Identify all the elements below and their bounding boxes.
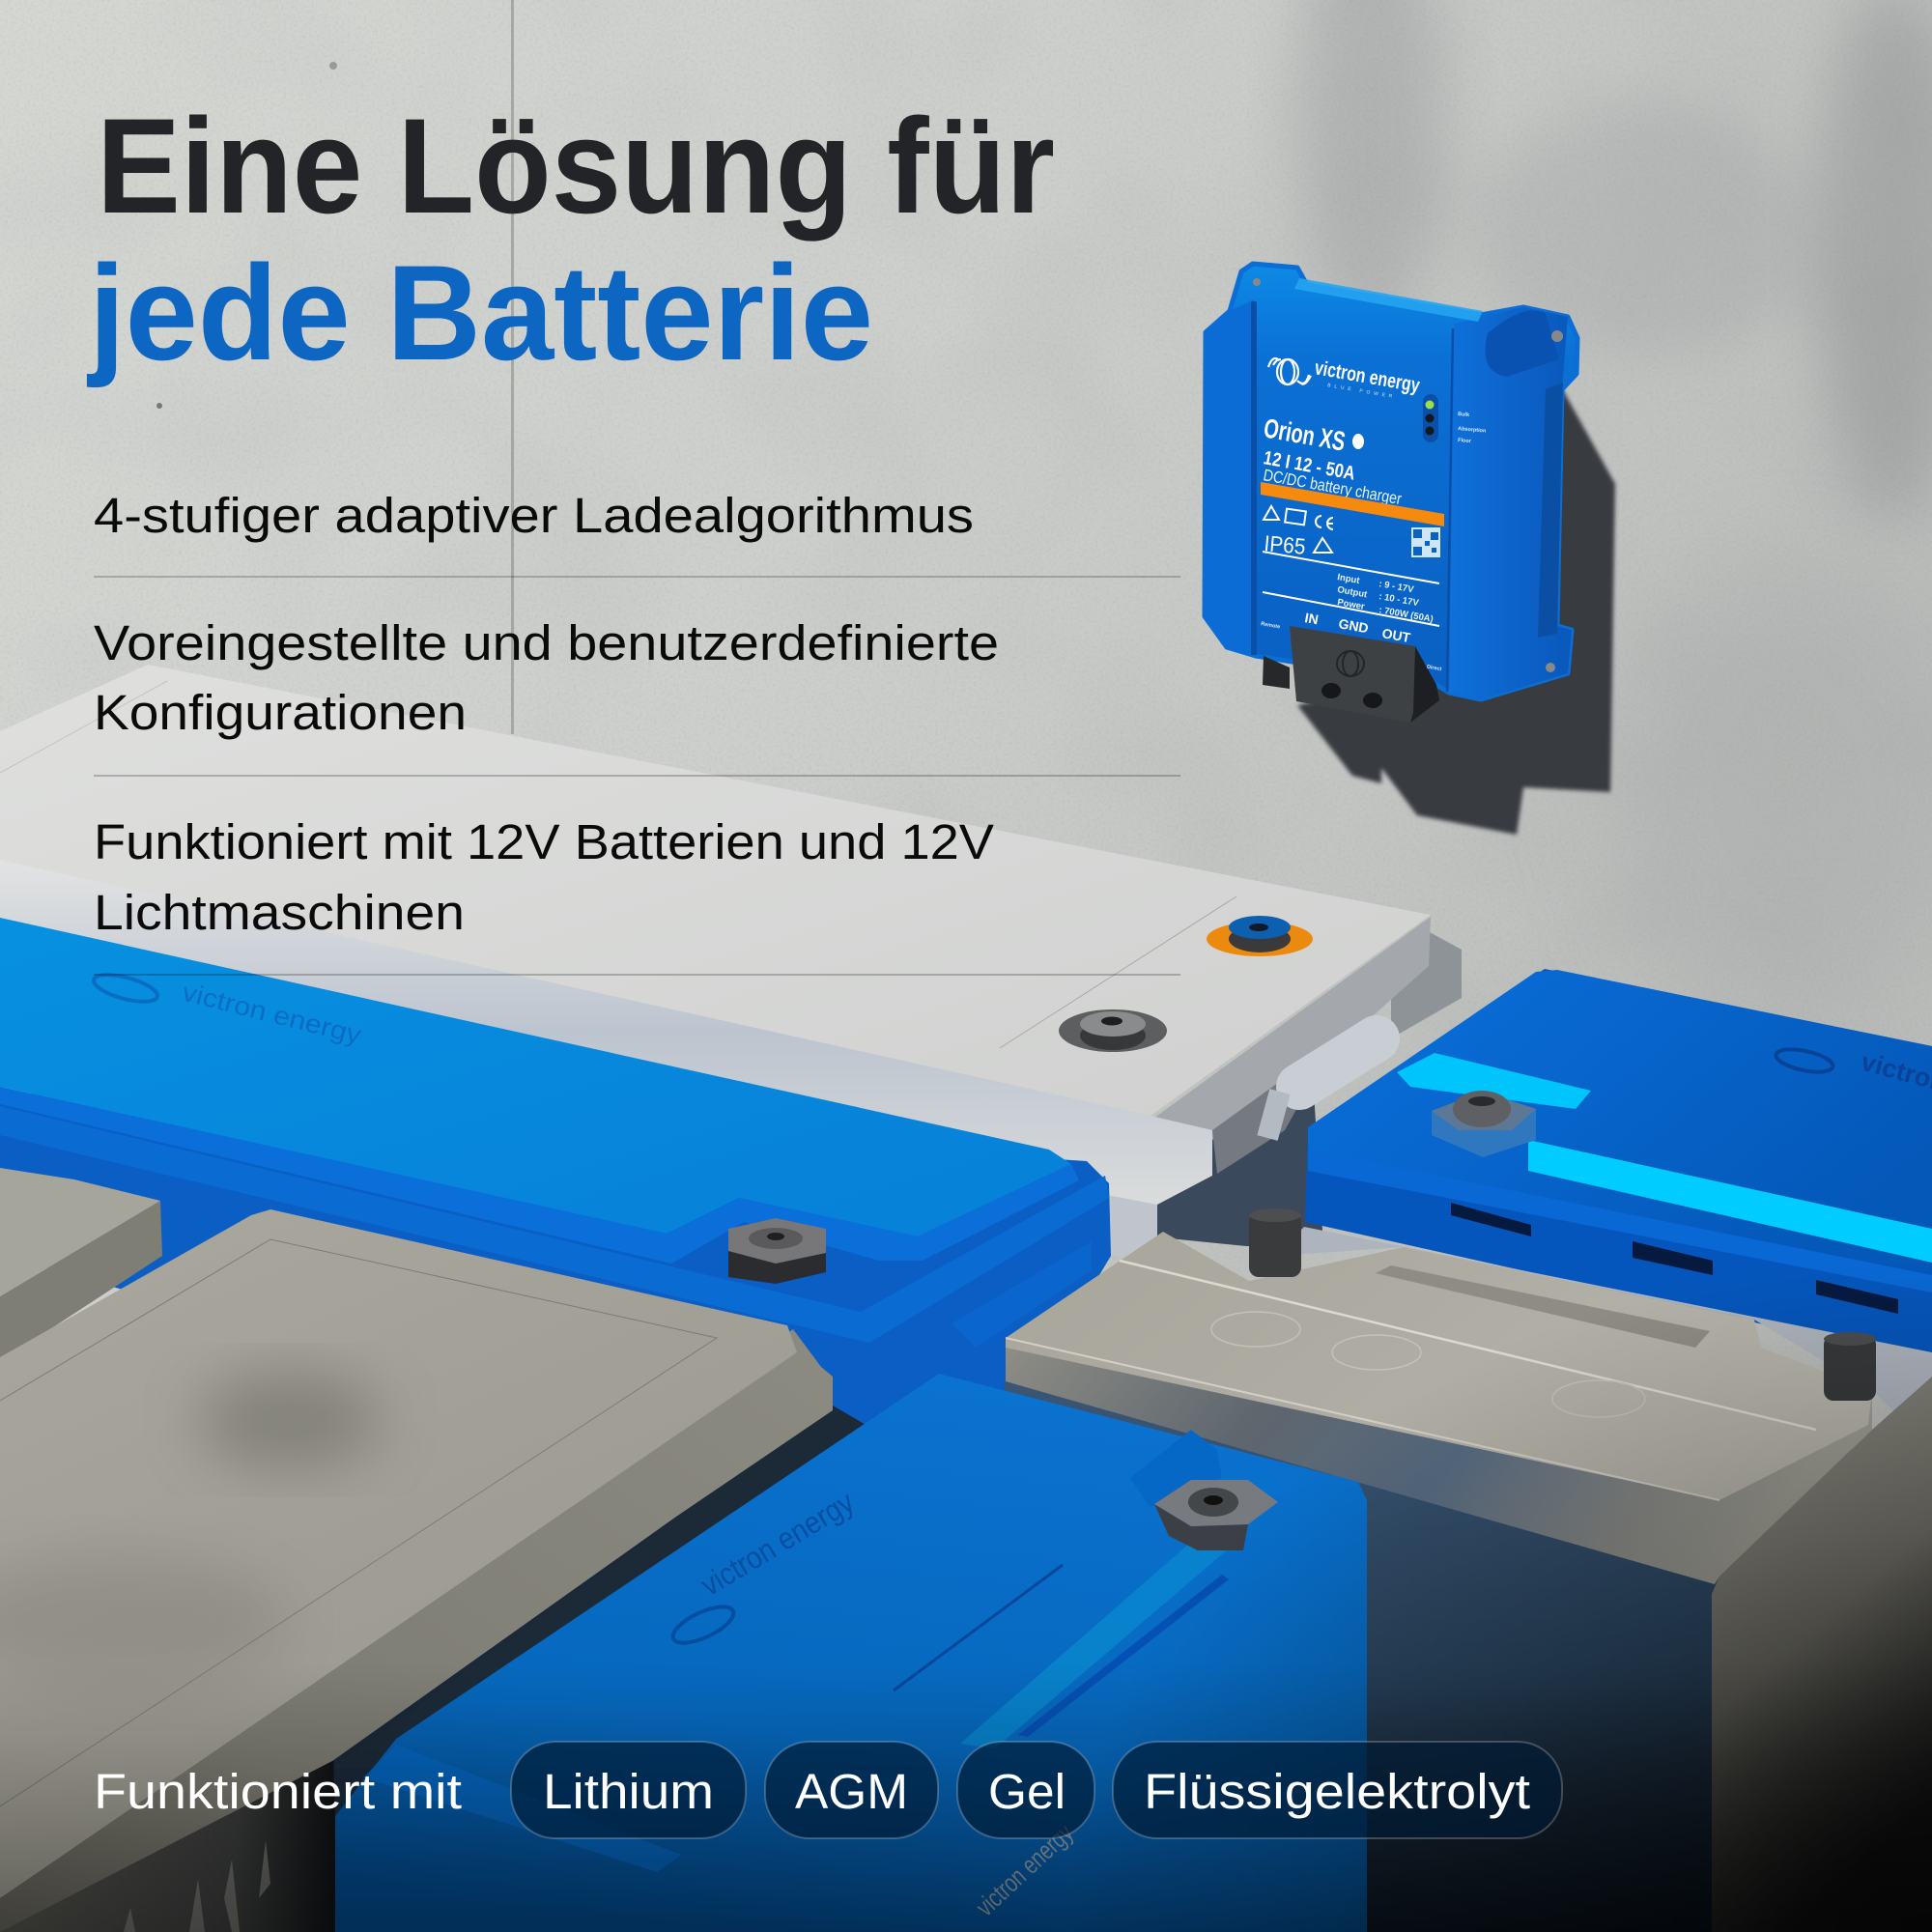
terminal pins bbox=[1249, 1208, 1876, 1401]
embossed brand bbox=[668, 1484, 860, 1650]
front blue battery bbox=[335, 1374, 1367, 1932]
far left grey battery bbox=[0, 1168, 162, 1362]
embossed brand: victron energy bbox=[695, 1484, 860, 1603]
battery types row bbox=[94, 1742, 1562, 1838]
small labels: Floor bbox=[1458, 438, 1472, 444]
cable bbox=[1267, 1038, 1377, 1138]
embossed brand: victron energy bbox=[180, 978, 365, 1050]
terminal cover bbox=[1290, 626, 1439, 723]
top right blue battery bbox=[1305, 969, 1932, 1362]
bracket bbox=[1391, 932, 1462, 1038]
spec table: : 9 - 17V bbox=[1378, 579, 1415, 595]
spec table: Power bbox=[1336, 597, 1366, 612]
row label: Funktioniert mit bbox=[94, 1764, 462, 1819]
battery front rim bbox=[0, 860, 1212, 1205]
Orion XS charger: BLUE POWER bbox=[1327, 383, 1393, 400]
hex terminal bbox=[1432, 1091, 1536, 1157]
spec table bbox=[1336, 572, 1435, 625]
pill: Lithium bbox=[511, 1742, 746, 1838]
feature 3: Lichtmaschinen bbox=[94, 885, 465, 940]
lid top bbox=[1006, 1232, 1872, 1500]
left terminal connector bbox=[1263, 656, 1290, 689]
side spikes bbox=[124, 1840, 270, 1932]
dark gap below white battery bbox=[1140, 1092, 1323, 1246]
lid front bbox=[1006, 1338, 1872, 1584]
battery top bbox=[0, 665, 1431, 1116]
charger body bbox=[1205, 264, 1577, 699]
pill: Gel: Gel bbox=[988, 1764, 1065, 1819]
positive terminal bbox=[1207, 916, 1313, 956]
feature 2 bbox=[94, 615, 999, 740]
right side rail bbox=[1538, 383, 1563, 638]
spec rules bbox=[1263, 552, 1439, 626]
right side bbox=[1712, 1377, 1932, 1932]
small labels: Bulk bbox=[1458, 412, 1470, 418]
white battery bbox=[0, 665, 1462, 1256]
terminal labels: IN bbox=[1303, 610, 1320, 627]
rating: 12 I 12 - 50A bbox=[1262, 447, 1356, 485]
embossed slot bbox=[894, 1565, 1063, 1690]
terminal labels: OUT bbox=[1380, 625, 1412, 645]
lid slot bbox=[1018, 1575, 1229, 1737]
small labels: Remote bbox=[1261, 621, 1281, 630]
orange stripe bbox=[1261, 482, 1444, 526]
bluetooth icon bbox=[1352, 434, 1364, 449]
pill: Flüssigelektrolyt: Flüssigelektrolyt bbox=[1144, 1764, 1530, 1819]
pill: AGM bbox=[765, 1742, 938, 1838]
pill: AGM: AGM bbox=[795, 1764, 908, 1819]
battery side bbox=[1151, 917, 1431, 1140]
bottom vignette bbox=[0, 1256, 1932, 1932]
brand on lid bbox=[1775, 1045, 1932, 1097]
title bbox=[86, 90, 1055, 388]
hex terminal bbox=[728, 1218, 826, 1284]
spec table: Output bbox=[1336, 584, 1369, 601]
gap shadow toward blue battery bbox=[333, 1406, 874, 1768]
top highlight bbox=[1294, 278, 1483, 322]
small labels bbox=[1261, 412, 1487, 672]
lower front bbox=[1005, 1381, 1719, 1932]
hex terminal bbox=[1154, 1480, 1278, 1550]
pill: Gel bbox=[957, 1742, 1094, 1838]
charger cast shadow on wall bbox=[1297, 382, 1615, 835]
feature 2: Voreingestellte und benutzerdefinierte bbox=[94, 615, 999, 670]
QR code bbox=[1411, 527, 1440, 557]
description: DC/DC battery charger bbox=[1262, 466, 1404, 508]
rim bbox=[0, 1329, 833, 1932]
title line 1: Eine Lösung für bbox=[97, 90, 1055, 242]
small labels: VE.Direct bbox=[1418, 663, 1442, 672]
upper right lug bbox=[1486, 310, 1559, 377]
small labels: Absorption bbox=[1458, 426, 1487, 435]
title line 2: jede Batterie bbox=[86, 237, 873, 388]
spec table: : 700W (50A) bbox=[1378, 605, 1435, 625]
charger brand: victron energy bbox=[1313, 356, 1422, 397]
dark side bbox=[0, 1753, 338, 1932]
front left grey battery bbox=[0, 1209, 874, 1932]
feature 2: Konfigurationen bbox=[94, 685, 467, 740]
slots bbox=[1451, 1203, 1898, 1314]
pill: Flüssigelektrolyt bbox=[1113, 1742, 1562, 1838]
charger logo bbox=[1268, 358, 1311, 384]
feature list bbox=[94, 488, 1180, 976]
status LEDs bbox=[1423, 394, 1438, 442]
feature 1: 4-stufiger adaptiver Ladealgorithmus bbox=[94, 488, 974, 543]
feature 3 bbox=[94, 814, 994, 940]
background: concrete wall bbox=[0, 0, 1932, 1449]
light blue battery bbox=[0, 918, 1111, 1468]
certification icons bbox=[1264, 506, 1333, 553]
top face bbox=[1308, 970, 1932, 1285]
pill: Lithium: Lithium bbox=[543, 1764, 714, 1819]
spec table: Input bbox=[1336, 572, 1361, 586]
top bbox=[0, 1209, 797, 1898]
embossed circles bbox=[1211, 1312, 1645, 1417]
feature 3: Funktioniert mit 12V Batterien und 12V bbox=[94, 814, 994, 869]
side lug bbox=[952, 1241, 1092, 1348]
lower brand: victron energy bbox=[971, 1818, 1079, 1921]
body bbox=[0, 1092, 1111, 1468]
IP65: IP65 bbox=[1264, 530, 1307, 559]
terminal labels bbox=[1303, 610, 1412, 645]
lid lit strip bbox=[960, 1536, 1229, 1748]
embossed brand bbox=[91, 970, 365, 1050]
model name: Orion XS bbox=[1262, 412, 1348, 457]
Orion XS charger bbox=[1205, 264, 1577, 723]
negative terminal bbox=[1059, 1009, 1167, 1052]
lower lid step bbox=[363, 1745, 681, 1872]
terminal labels: GND bbox=[1337, 615, 1370, 636]
spec table: : 10 - 17V bbox=[1378, 591, 1420, 609]
left body strip bbox=[1205, 299, 1256, 656]
right body panel bbox=[1449, 307, 1572, 699]
lit strips bbox=[1397, 1053, 1591, 1109]
screws bbox=[1253, 278, 1563, 672]
lid step bbox=[1130, 1430, 1222, 1507]
lid bbox=[0, 918, 1071, 1236]
smudge bbox=[198, 1372, 382, 1468]
right grey battery bbox=[1005, 1208, 1932, 1932]
floor sliver bbox=[1275, 1227, 1932, 1449]
handle shape bbox=[1006, 1261, 1816, 1500]
